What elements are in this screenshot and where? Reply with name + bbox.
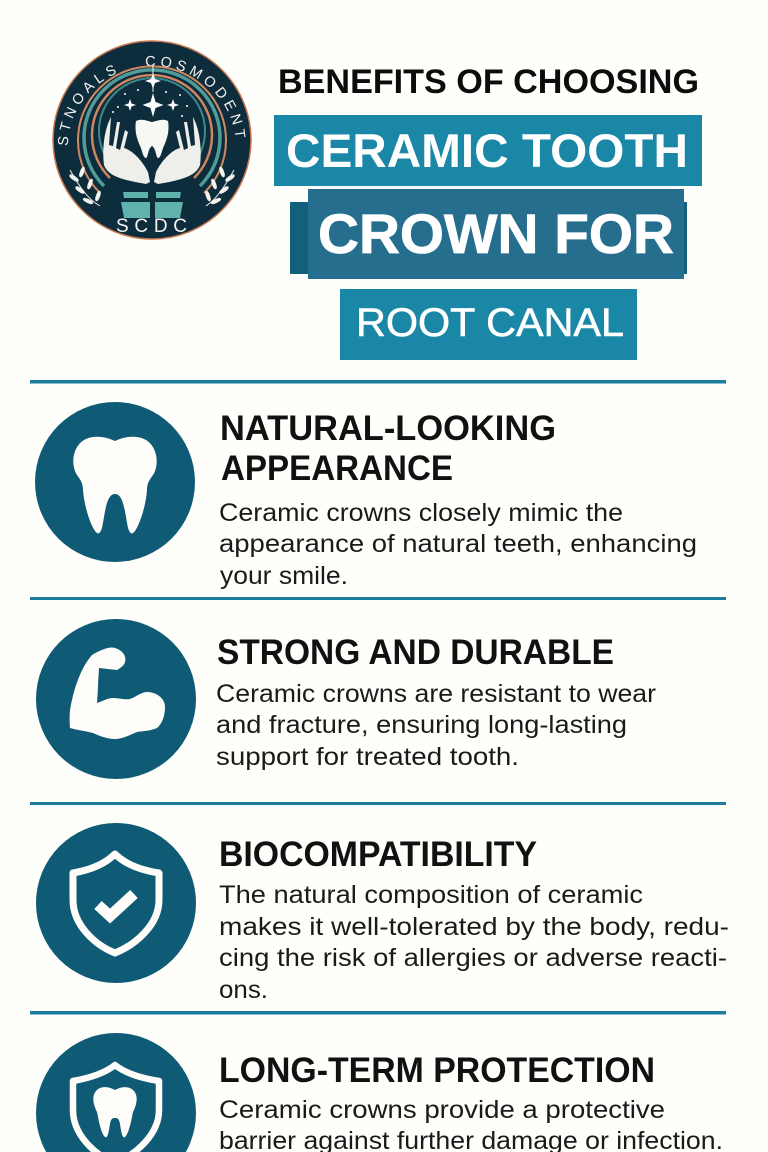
icon: tooth (35, 402, 195, 562)
title banner: ceramic tooth: CERAMIC TOOTH (286, 124, 688, 177)
text: biocompatibility description: ons. (219, 976, 268, 1004)
panel: long-term protection (36, 1033, 723, 1152)
text: natural-looking description: Ceramic crowns closely mimic the (219, 499, 623, 527)
title banner: crown for: CROWN FOR (318, 202, 674, 265)
heading: natural-looking appearance: NATURAL-LOOKING (220, 409, 556, 448)
text: biocompatibility description: cing the risk of allergies or adverse reacti- (219, 944, 727, 972)
heading: biocompatibility: BIOCOMPATIBILITY (219, 835, 537, 874)
title line: benefits of choosing: BENEFITS OF CHOOSING (278, 63, 699, 101)
icon: flexed arm (36, 619, 196, 779)
heading: natural-looking appearance: APPEARANCE (221, 449, 453, 488)
icon: shield with tooth (36, 1033, 196, 1152)
text: biocompatibility description (219, 881, 729, 1004)
text: strong and durable description (216, 680, 656, 771)
panel: biocompatibility (36, 823, 729, 1004)
heading: long-term protection: LONG-TERM PROTECTION (219, 1051, 655, 1090)
title banner: crown for (290, 189, 687, 279)
logo: SCDC round emblem (52, 40, 252, 240)
text: biocompatibility description: The natural composition of ceramic (219, 881, 643, 909)
panel: strong and durable (36, 619, 656, 779)
title banner: root canal (340, 289, 637, 360)
title banner: root canal: ROOT CANAL (356, 301, 624, 345)
logo: SCDC round emblem: SCDC (116, 216, 187, 237)
text: strong and durable description: support for treated tooth. (216, 743, 519, 771)
text: biocompatibility description: makes it well-tolerated by the body, redu- (219, 913, 729, 941)
panel: natural-looking appearance (35, 402, 697, 590)
heading: strong and durable: STRONG AND DURABLE (217, 633, 614, 672)
text: long-term protection description (219, 1096, 723, 1152)
text: natural-looking description: appearance of natural teeth, enhancing (219, 530, 697, 558)
text: strong and durable description: Ceramic crowns are resistant to wear (216, 680, 656, 708)
heading: natural-looking appearance (220, 409, 556, 488)
icon: shield with check mark (36, 823, 196, 983)
text: long-term protection description: Ceramic crowns provide a protective (219, 1096, 665, 1124)
text: strong and durable description: and fracture, ensuring long-lasting (216, 711, 627, 739)
title banner: ceramic tooth (274, 115, 702, 186)
text: natural-looking description: your smile. (220, 562, 348, 590)
text: natural-looking description (219, 499, 697, 590)
